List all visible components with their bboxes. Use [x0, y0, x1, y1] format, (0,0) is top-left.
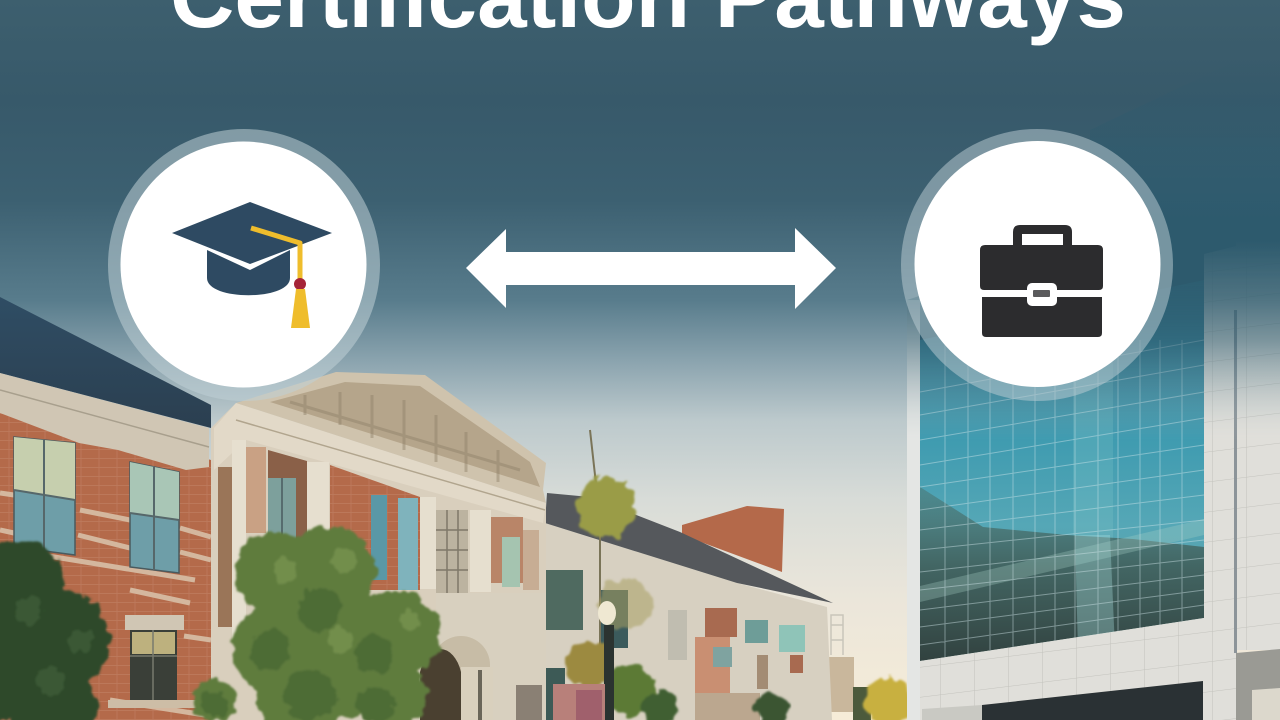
pavilion windows [268, 478, 520, 597]
modern glass building [907, 256, 1280, 720]
slate roof left wing [0, 297, 211, 428]
wing windows [543, 570, 805, 720]
central stone pavilion [211, 403, 546, 720]
tree: far left [0, 539, 110, 720]
pavilion brick bays [218, 447, 539, 627]
window 1 [14, 437, 75, 555]
wall stone bands [0, 493, 211, 716]
campus trees [0, 430, 788, 720]
lower right recess [1236, 649, 1280, 720]
glass facade [920, 280, 1204, 661]
double-headed arrow [466, 228, 836, 309]
pavilion columns [232, 440, 491, 640]
teal shadow wedge behind glass building [907, 40, 1280, 440]
icon: briefcase badge [901, 129, 1173, 401]
briefcase [980, 225, 1103, 337]
right campus wing [543, 493, 833, 720]
distant structures and autumn trees [827, 615, 912, 720]
small dark shrub [754, 693, 788, 720]
icon: graduation cap badge [108, 129, 380, 401]
brick chimney block [682, 506, 784, 572]
pediment frieze [236, 372, 546, 503]
tiled wall below glass [920, 618, 1204, 720]
wing wall [545, 523, 832, 720]
slate roof [545, 493, 833, 603]
entablature [214, 403, 546, 523]
window 2 [130, 462, 179, 573]
left white column [907, 300, 920, 720]
window 3 with lintel [108, 615, 198, 708]
stone cornice band [0, 373, 209, 470]
tree: centre [193, 526, 439, 720]
dark ground floor windows [982, 681, 1203, 720]
lower stone wall with arched entry [420, 593, 564, 720]
graduation cap [172, 202, 332, 328]
street lamp [598, 601, 616, 720]
banner sign [553, 684, 605, 720]
left wing brick wall [0, 400, 211, 720]
historic brick campus building [0, 297, 564, 720]
glass mullions [920, 340, 1204, 657]
tiled tower columns [1204, 246, 1236, 720]
tree: yellow sapling [566, 430, 678, 720]
